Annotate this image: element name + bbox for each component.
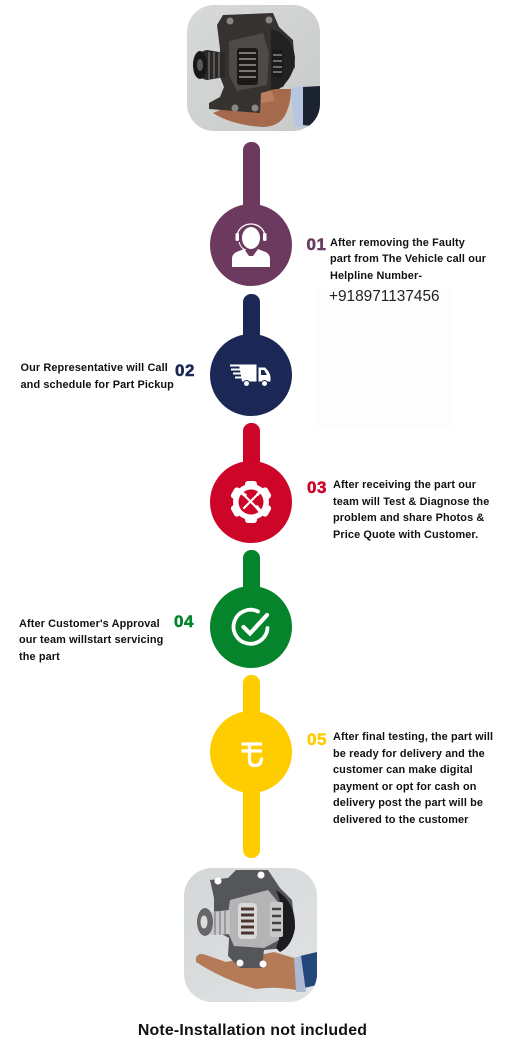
icon: gear with wrench (229, 481, 272, 523)
stem: step 1 (243, 142, 260, 222)
step 5 text: payment or opt for cash on (333, 780, 477, 792)
step 5 number: 05 (307, 730, 327, 749)
step 1 text: part from The Vehicle call our (330, 253, 486, 265)
step 1 text (330, 236, 486, 282)
step 1 circle with agent icon (210, 204, 292, 286)
step 3 text: After receiving the part our (333, 479, 476, 491)
step 4 text: After Customer's Approval (19, 618, 160, 630)
step 5 text (333, 731, 493, 826)
icon: check mark (233, 610, 267, 644)
photo: hand holding faulty alternator (187, 5, 320, 131)
step 4 text: the part (19, 650, 60, 662)
step 1 text: After removing the Faulty (330, 236, 465, 248)
step 5 text: customer can make digital (333, 764, 473, 776)
step 4 text: our team willstart servicing (19, 634, 163, 646)
step 3 text: team will Test & Diagnose the (333, 496, 489, 508)
step 1 number: 01 (306, 235, 327, 254)
step 2 text (20, 362, 174, 390)
faint panel behind phone number (315, 288, 454, 427)
photo: hand holding repaired alternator (184, 868, 317, 1002)
step 2 number: 02 (175, 360, 195, 380)
stem: step 4 (243, 550, 260, 610)
step 3 text: problem and share Photos & (333, 512, 484, 524)
stem: step 2 (243, 294, 260, 354)
icon: headset agent (232, 224, 270, 267)
step 5 text: be ready for delivery and the (333, 748, 485, 760)
icon: rupee (241, 744, 262, 766)
stem: step 5 (243, 675, 260, 858)
phone number: +918971137456 (329, 288, 440, 305)
step 3 number: 03 (307, 478, 327, 497)
step 2 circle with truck icon (210, 334, 292, 416)
step 5 text: delivered to the customer (333, 814, 469, 826)
step 4 text (19, 618, 163, 662)
step 3 text (333, 479, 489, 540)
step 3 circle with gear and tools icon (210, 462, 292, 543)
step 4 number: 04 (174, 612, 194, 630)
step 2 text: Our Representative will Call (20, 362, 168, 374)
stem: step 3 (243, 423, 260, 483)
step 3 text: Price Quote with Customer. (333, 528, 478, 540)
step 5 circle with rupee symbol (210, 712, 292, 792)
icon: delivery truck (230, 364, 270, 386)
step 2 text: and schedule for Part Pickup (20, 378, 174, 390)
step 1 text: Helpline Number- (330, 270, 422, 282)
step 4 circle with check icon (210, 586, 292, 668)
step 5 text: delivery post the part will be (333, 797, 483, 809)
installation note: Note-Installation not included (138, 1022, 367, 1039)
step 5 text: After final testing, the part will (333, 731, 493, 743)
